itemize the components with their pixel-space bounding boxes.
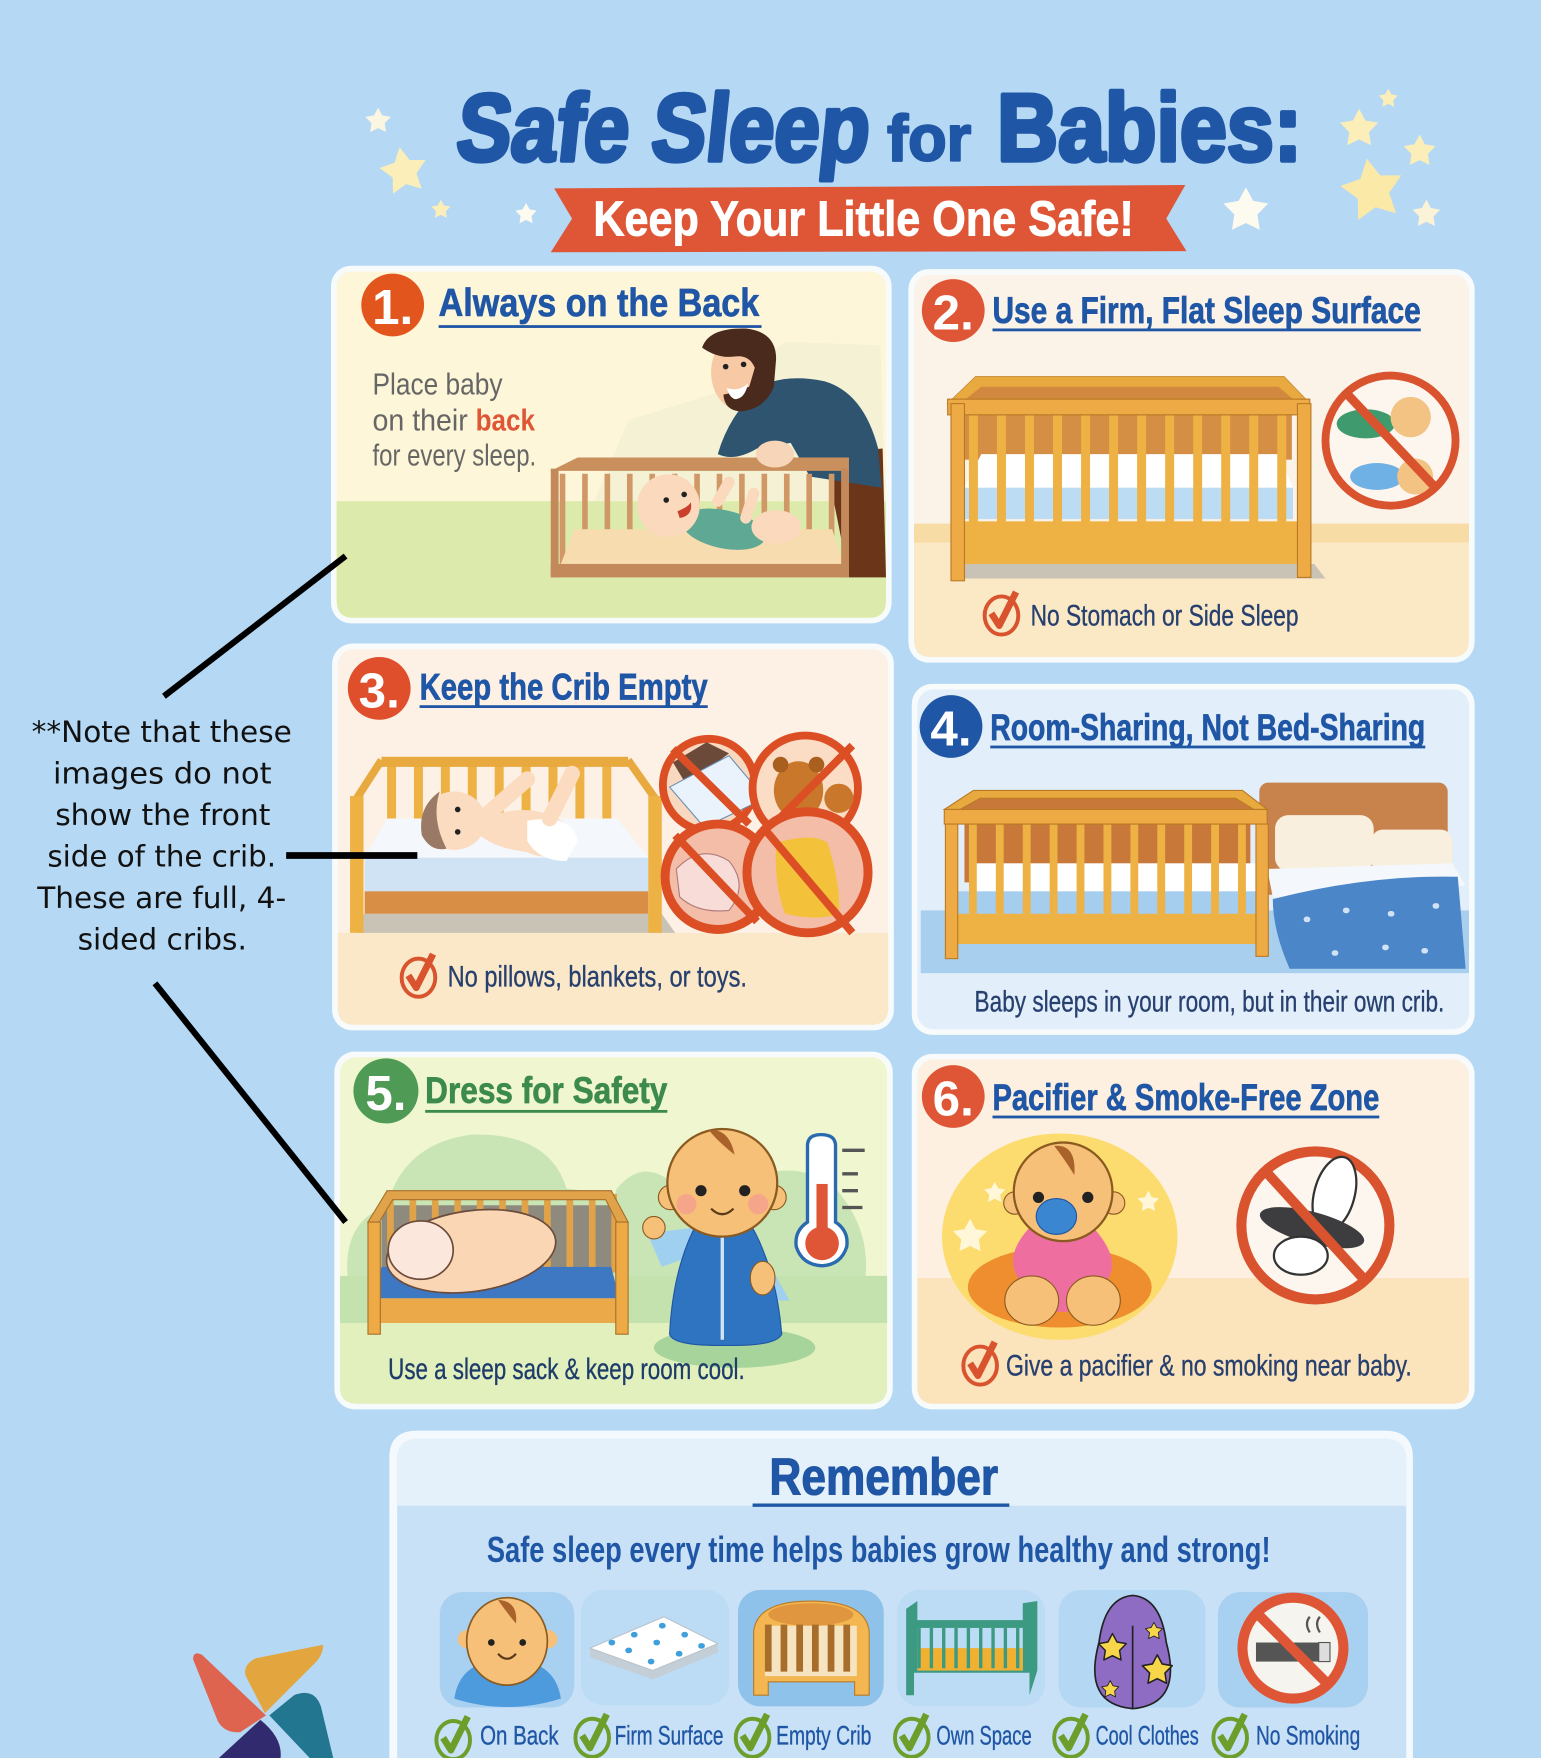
prohibited sleep positions [1325,376,1456,506]
checklist labels: On Back [480,1721,559,1751]
tile: on back [440,1592,574,1708]
checklist labels: Own Space [936,1721,1032,1751]
tile: cool clothes [1059,1590,1206,1709]
baby on back [637,474,801,557]
badge 6 [922,1065,985,1128]
body text 1: for every sleep. [372,439,536,472]
checklist labels [436,1714,1360,1758]
swaddled baby [381,1199,561,1303]
adult bed [1259,783,1466,969]
caption 6 [963,1342,1412,1385]
annotation note: show the front [55,798,270,832]
crib 4 [944,790,1268,959]
title: for [887,101,971,174]
annotation note: sided cribs. [78,923,247,957]
annotation pointer lines [155,556,417,1222]
tile: no smoking [1218,1592,1368,1708]
heading 4: Room-Sharing, Not Bed-Sharing [990,707,1425,748]
father illustration [702,328,886,577]
prohibited crib items [663,735,868,933]
caption 3 [402,954,747,997]
panel 5: dress for safety [334,1052,893,1409]
baby in crib [421,774,578,861]
badge 6: 6. [933,1072,974,1127]
crib 2 [948,377,1325,581]
caption 6: Give a pacifier & no smoking near baby. [1006,1351,1412,1383]
badge 1 [361,274,424,336]
annotation note [32,715,292,957]
title: Babies: [997,75,1302,181]
heading 1: Always on the Back [439,281,759,325]
panel 2: firm flat surface [908,269,1475,663]
caption 5: Use a sleep sack & keep room cool. [388,1354,745,1386]
remember heading: Remember [769,1448,998,1506]
ribbon subtitle: Keep Your Little One Safe! [593,191,1134,246]
badge 2 [922,279,985,342]
tile: own space [897,1590,1045,1706]
annotation note: side of the crib. [47,840,276,874]
panel 3: keep the crib empty [332,644,894,1030]
crib 1 [551,441,849,577]
crib 3 [350,757,675,933]
checklist labels: No Smoking [1256,1721,1360,1751]
crib 5 [368,1191,628,1334]
annotation note: images do not [53,757,272,791]
badge 3 [348,657,411,720]
caption 3: No pillows, blankets, or toys. [448,962,747,994]
heading 2: Use a Firm, Flat Sleep Surface [992,290,1421,331]
panel 1: always on the back [331,266,892,623]
body text 1: Place baby [372,369,503,402]
thermometer [796,1135,865,1266]
checklist labels: Cool Clothes [1096,1721,1199,1751]
badge 4: 4. [930,702,972,757]
annotation note: These are full, 4- [36,881,286,915]
badge 4 [920,695,982,758]
body text 1: on their [372,405,468,438]
badge 5: 5. [365,1066,407,1121]
body text 1: back [476,405,535,438]
baby in sleep sack [643,1129,790,1345]
baby with pacifier [942,1134,1177,1340]
caption 2 [985,592,1299,635]
heading 5: Dress for Safety [425,1070,668,1111]
badge 3: 3. [359,663,400,718]
tile: empty crib [738,1590,884,1706]
remember tagline: Safe sleep every time helps babies grow healthy and strong! [487,1530,1271,1570]
panel 4: room sharing [912,684,1475,1035]
panel: remember [389,1431,1413,1758]
caption 2: No Stomach or Side Sleep [1031,601,1299,633]
tile: firm surface [581,1590,729,1705]
title: Safe Sleep [452,75,876,181]
heading 3: Keep the Crib Empty [420,667,708,708]
heading 6: Pacifier & Smoke-Free Zone [992,1077,1379,1118]
decorative stars [365,89,1440,230]
checklist labels: Firm Surface [615,1721,723,1751]
checklist labels: Empty Crib [776,1721,871,1751]
badge 1: 1. [372,280,413,335]
panel 6: pacifier and smoke free [912,1054,1475,1409]
badge 2: 2. [933,286,974,341]
badge 5 [353,1058,418,1123]
annotation note: **Note that these [32,715,292,749]
logo: pinwheel [193,1645,333,1758]
prohibited pacifier [1241,1151,1389,1299]
title [452,75,1302,181]
body text 1 [372,369,536,472]
